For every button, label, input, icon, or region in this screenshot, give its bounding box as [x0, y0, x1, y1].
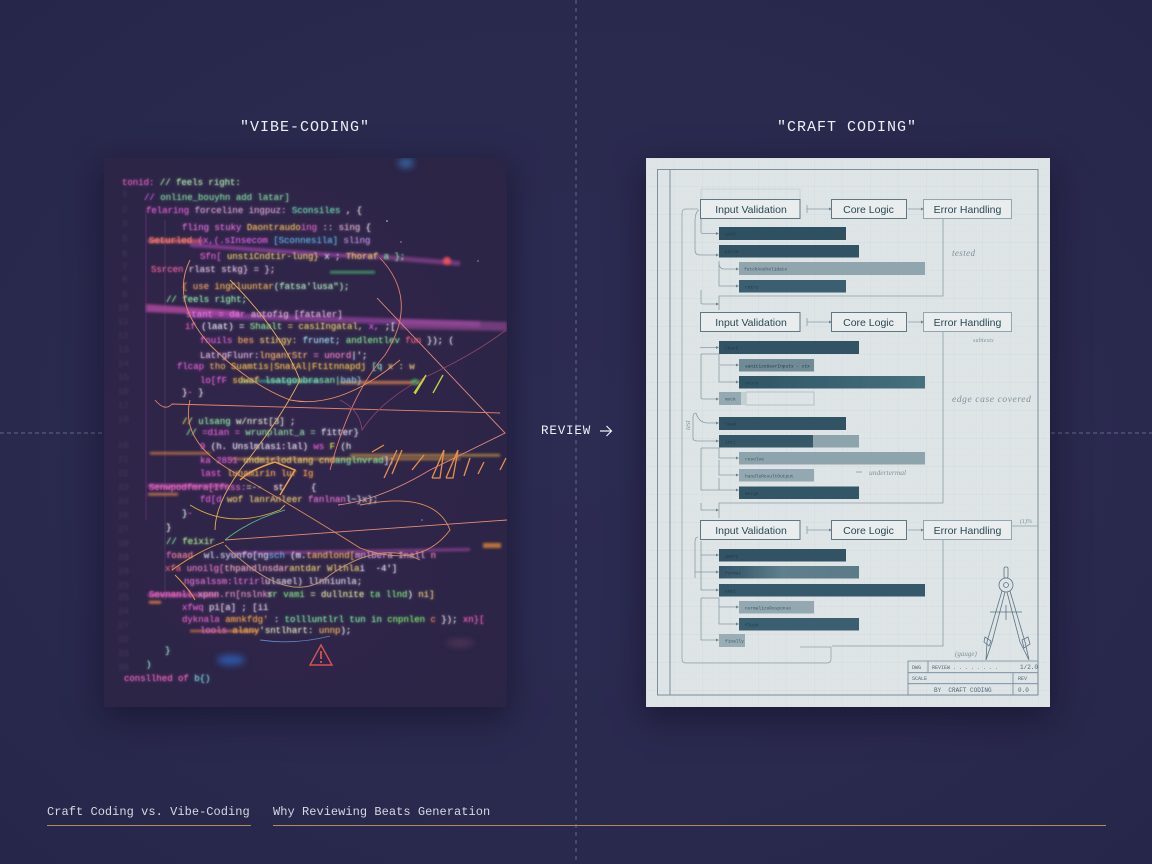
code text: lools alany'sntlhart: unnp);: [200, 626, 351, 636]
code text: ngsalssm:ltrirlulsael) llnhiunla;: [184, 577, 362, 587]
line numbers: 24: [118, 497, 129, 507]
process row 3: Error Handling: [934, 525, 1002, 537]
smeared neon bands: [146, 239, 507, 632]
code text: }-: [182, 509, 193, 519]
code text: fling stuky Daontraudoing :: sing {: [182, 223, 371, 233]
bars group 2: [719, 341, 925, 499]
arrow label: review: REVIEW: [541, 424, 591, 438]
code text: dyknala amnkfdg' : tollluntlrl tun in cnpnlen c }); xn}[: [182, 615, 484, 625]
drawing frame: [658, 170, 1038, 695]
code text: }- }: [182, 388, 204, 398]
bar labels: parse: [725, 249, 739, 255]
line numbers: 10: [118, 303, 129, 313]
handwritten notes: edge case covered: [952, 395, 1031, 405]
line numbers: 13: [118, 345, 129, 355]
code text: // =dian = wrunplant_a = fitter}: [186, 428, 359, 438]
tangled orange threads: [155, 258, 507, 642]
line numbers: 14: [118, 359, 129, 369]
bar labels: load: [725, 422, 736, 428]
code text: ): [146, 660, 151, 670]
process row 2: [700, 312, 1012, 332]
bar labels: check: [725, 346, 739, 352]
line numbers: 18: [118, 415, 129, 425]
title block: 0.0: [1018, 687, 1029, 694]
code text: 9 (h. Unslmlasi:lal) ws F (h: [200, 442, 351, 452]
code text: fnuils bes stingy: frunet; andlentlev fun }); (: [200, 336, 454, 346]
bar labels: normalizeResponse: [745, 606, 791, 612]
code text: felaring forceline ingpuz: Sconsiles , {: [146, 206, 362, 216]
icon: warning triangle: [310, 645, 332, 665]
code text: // ulsang w/nrst[3] ;: [182, 417, 295, 427]
process row 2: Core Logic: [843, 317, 894, 329]
line numbers: 15: [118, 373, 129, 383]
line numbers: 21: [118, 455, 129, 465]
title block: 1/2.0: [1020, 664, 1038, 671]
code text: ka 2851 undmirlodlang cndanglnvrad];: [200, 456, 394, 466]
footer: left label: [47, 805, 251, 826]
title block: [908, 661, 1038, 695]
process row 1: Core Logic: [843, 204, 894, 216]
line numbers: 2: [122, 205, 127, 215]
line numbers: 28: [118, 539, 129, 549]
process row 2: Input Validation: [715, 317, 787, 329]
code text: Sfn[ unstiCndtir-lung} x ; Thoraf a };: [200, 252, 405, 262]
bar labels: handleResultOutput: [745, 474, 794, 480]
line numbers: 7: [122, 262, 127, 272]
heading: vibe-coding: "VIBE-CODING": [240, 119, 370, 136]
footer: right label: Why Reviewing Beats Generation: [273, 805, 490, 819]
line numbers: 23: [118, 483, 129, 493]
line numbers: 29: [118, 553, 129, 563]
heading: craft coding: "CRAFT CODING": [777, 119, 917, 136]
arrowheads: [716, 208, 924, 642]
line numbers: 23: [118, 581, 129, 591]
code text: stant = dar autofig [fataler]: [186, 310, 343, 320]
line numbers: 24: [118, 607, 129, 617]
code text: LatrgFlunr:lnganrStr = unord|';: [200, 351, 367, 361]
bar labels: fetchAndValidate: [744, 266, 788, 272]
code text: Seturled (x,(.sInsecom [Sconnesila] sling: [149, 236, 370, 246]
process row 1: Input Validation: [715, 204, 787, 216]
code text: // feels right;: [166, 295, 247, 305]
gutter guides: [146, 210, 165, 600]
code text: if (laat) = Shaalt = casiIngatal, x, ;[: [185, 322, 396, 332]
line numbers: 8: [122, 275, 127, 285]
code text: }: [165, 646, 170, 656]
line numbers: 35: [118, 663, 129, 673]
title block: DWG: [912, 665, 921, 671]
panel: vibe-coding code screen: [104, 158, 507, 707]
line numbers: 29: [118, 567, 129, 577]
code text: tonid: // feels right:: [122, 178, 241, 188]
code text: // online_bouyhn add latar]: [144, 193, 290, 203]
blue glow blobs: [217, 158, 474, 665]
line numbers: 12: [118, 331, 129, 341]
line numbers: 32: [118, 635, 129, 645]
code text: lo[fF sdwaf lsatgoubrasan|bab}: [200, 376, 362, 386]
bar labels: sanitizeUserInputs - ctx: [745, 364, 810, 370]
line numbers: 26: [118, 511, 129, 521]
line numbers: 1: [122, 189, 127, 199]
footer: right label: [273, 805, 1106, 826]
process row 1: Error Handling: [934, 204, 1002, 216]
code text: // feixir: [166, 537, 215, 547]
code text: consllhed of b{): [124, 674, 210, 684]
process row 3: Input Validation: [715, 525, 787, 537]
process row 3: Core Logic: [843, 525, 894, 537]
bar labels: [725, 232, 810, 644]
line numbers: 3: [122, 219, 127, 229]
code text: xfwq pi[a] ; [ii: [182, 603, 268, 613]
code text: Ssrcen rlast stkg} = };: [151, 265, 275, 275]
footer: left label: Craft Coding vs. Vibe-Coding: [47, 805, 250, 819]
bar labels: init: [725, 440, 736, 446]
line numbers: 33: [118, 649, 129, 659]
title block: REVIEW . . . . . . . .: [932, 665, 998, 671]
title block: SCALE: [912, 676, 927, 682]
bar labels: merge: [745, 491, 759, 497]
bar labels: auth: [725, 232, 736, 238]
code text: flcap tho Suamtis|SnatAl|Ftitnnapdj [q x : w: [177, 362, 415, 372]
handwritten notes: [684, 248, 1032, 658]
icon: drafting compass: [984, 567, 1030, 660]
process row 3: [700, 520, 1012, 540]
panel: craft coding blueprint: [646, 158, 1050, 707]
line numbers: 9: [122, 290, 127, 300]
code text: }: [166, 523, 171, 533]
bar labels: query: [725, 554, 739, 560]
hatch strokes: [372, 375, 506, 478]
code text: fd[d wof lanrAnleer fanlnanl~}x};: [200, 495, 378, 505]
bar labels: format: [725, 570, 742, 576]
code text: last lunamirin lur Ig: [200, 469, 313, 479]
bar labels: flush: [745, 622, 759, 628]
line numbers: 17: [118, 401, 129, 411]
handwritten notes: (gauge): [955, 650, 977, 658]
bar labels: mock: [725, 396, 736, 402]
bar labels: retry: [745, 284, 759, 290]
bokeh specks: [386, 220, 479, 521]
title block: BY CRAFT CODING: [934, 687, 992, 694]
bar labels: emit: [725, 588, 736, 594]
bar labels: store: [745, 380, 759, 386]
line numbers: 5: [122, 234, 127, 244]
code text: { use ingCluuntar(fatsa'lusa");: [182, 282, 349, 292]
bar labels: resolve: [745, 456, 764, 462]
line numbers: 11: [118, 317, 129, 327]
handwritten notes: subtests: [973, 338, 994, 344]
line numbers: 27: [118, 525, 129, 535]
bar labels: finally: [725, 638, 744, 644]
title block: REV: [1018, 676, 1027, 682]
line numbers: 22: [118, 469, 129, 479]
handwritten notes: (1)%: [1020, 518, 1032, 525]
code text: [122, 178, 484, 684]
line numbers: 25: [118, 593, 129, 603]
handwritten notes: tested: [952, 248, 975, 258]
line numbers: [118, 189, 129, 673]
line numbers: 16: [118, 387, 129, 397]
code text: Sevnanll xpnn.rn[nslnkr: [149, 590, 273, 600]
bars group 1: [719, 227, 925, 292]
handwritten notes: undertermal: [869, 468, 906, 477]
code text: foaad wl.syunfo[ngsch (m.tandlond[mnlbera Inall n: [166, 551, 436, 561]
line numbers: 20: [118, 441, 129, 451]
bars group 3: [719, 549, 925, 647]
handwritten notes: test: [684, 419, 692, 430]
code text: xfa unoilg[thpandlnsdarantdar Wlthlai -4']: [165, 564, 397, 574]
connector lines: [682, 189, 1038, 663]
line numbers: 27: [118, 621, 129, 631]
icon: right arrow: [600, 426, 612, 436]
process row 2: Error Handling: [934, 317, 1002, 329]
process row 1: [700, 200, 1012, 218]
code text: Senwpodfmra[Ifnss:=-- st {: [149, 483, 316, 493]
code text: sr vami = dullnite ta llnd) ni]: [240, 590, 434, 600]
line numbers: 6: [122, 249, 127, 259]
